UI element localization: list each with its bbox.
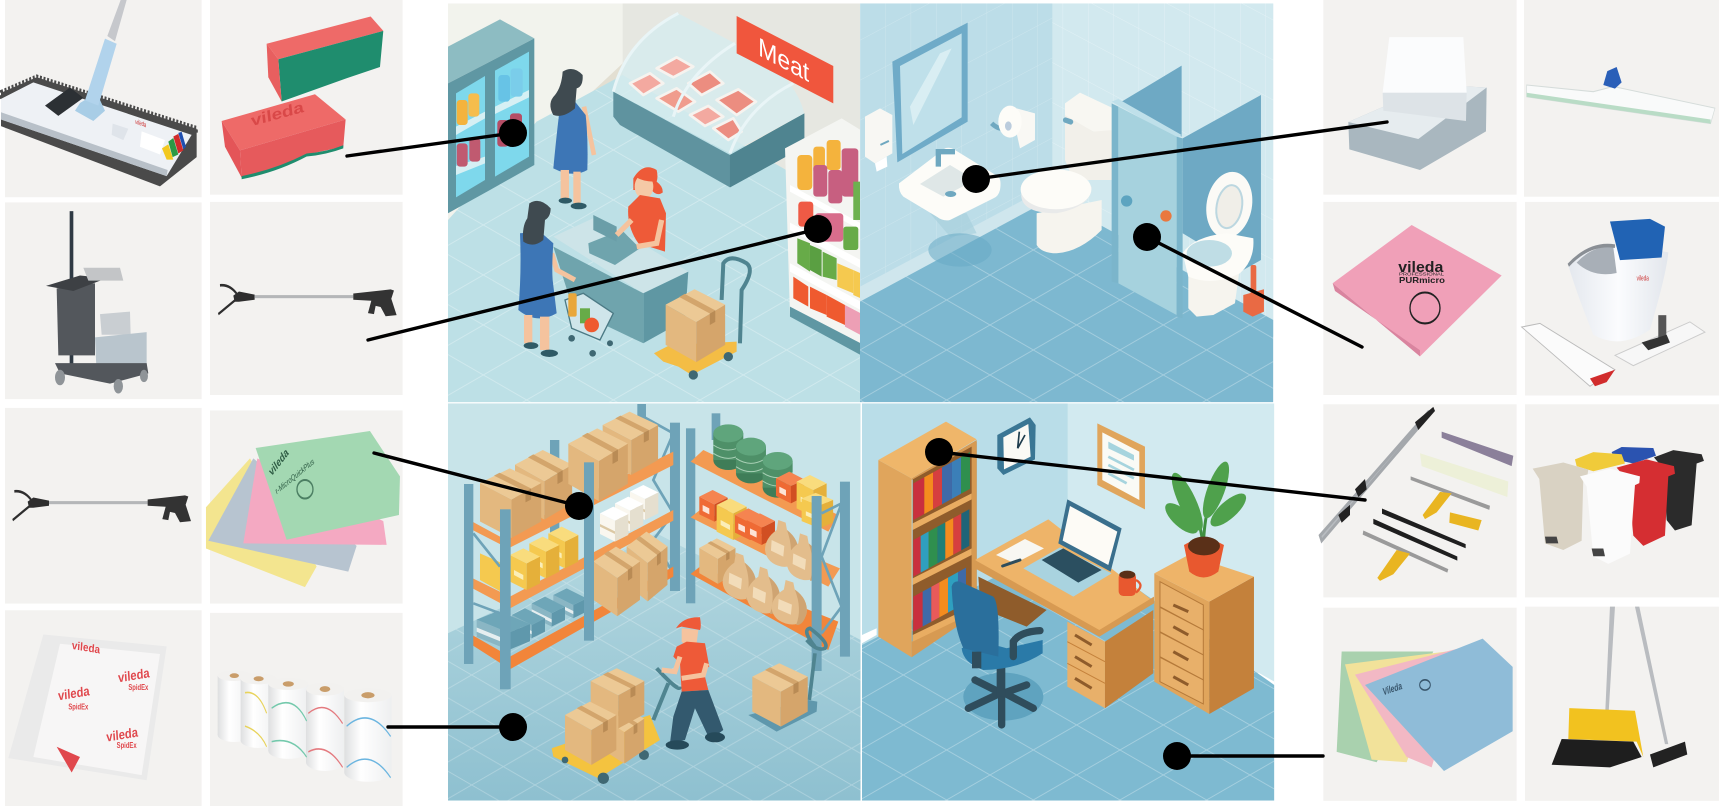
scene: supermarket [448,3,863,402]
desk [975,519,1154,708]
bookcase [878,422,977,657]
tile: paper towel rolls [210,613,403,806]
product tiles: right columns [1320,0,1719,801]
checkout counter [553,215,688,343]
callout: fridge to sponges [347,119,527,156]
books lower shelf [913,568,966,632]
callout: cubicle to pink cloth [1133,223,1362,347]
shopping cart [565,293,613,357]
office floor [862,578,1274,800]
wall clock [997,417,1036,475]
office chair [952,581,1043,725]
tile: flat mop: vileda [135,119,147,130]
meat display counter [613,13,804,187]
soap dispenser [865,108,892,172]
washroom floor [860,198,1273,402]
tile: coloured microfibre cloths [206,410,403,604]
potted plant [1160,459,1251,577]
toilet in open area [1021,93,1113,253]
tile: SpidEx bag: SpidEx [68,704,88,712]
toilet brush [1243,265,1264,317]
tile: mop bucket set [1522,202,1719,396]
tile: SpidEx bag: vileda [106,726,139,745]
callout: shelf to litter picker tile [368,215,832,340]
hand cart with boxes [552,668,680,784]
tile: SpidEx bag: vileda [58,685,91,704]
tile: floor squeegee [1524,0,1719,197]
callout: bookcase to window kit [925,438,1365,500]
customer at meat counter [550,69,594,209]
toilet inside cubicle [1183,168,1257,317]
customer at checkout [518,201,575,357]
tile: dustpan and brush [1525,607,1719,801]
tile: pink PURmicro cloth: PROFESSIONAL [1399,272,1444,277]
tile: SpidEx bag: SpidEx [128,684,148,692]
tile: coloured microfibre cloths: vileda [268,446,291,479]
tile: flat mop [1,0,202,197]
tile: mop bucket set: vileda [1637,276,1649,283]
paper and pen [996,539,1044,566]
product shelf [785,118,861,355]
tile: blue and coloured sheets [1323,608,1517,801]
tile: SpidEx bag: vileda [118,667,151,686]
sink [899,148,1001,267]
Meat sign [737,16,833,103]
toilet paper holder [992,106,1035,148]
filing cabinet [1154,555,1254,714]
tile: pink PURmicro cloth: PURmicro [1399,277,1445,286]
cubicle partition [1112,66,1261,318]
framed document [1097,423,1145,509]
mirror [892,23,968,162]
warehouse floor [448,533,861,801]
tile: SpidEx bag [5,610,202,806]
warehouse worker [662,617,725,750]
shop floor [448,75,861,402]
scene: office [862,403,1274,801]
scene: washroom [860,3,1274,402]
coffee mug [1119,571,1140,596]
tile: blue and coloured sheets: Vileda [1382,680,1403,698]
tile: SpidEx bag: vileda [71,639,101,657]
tile: melamine sponges [1323,0,1517,195]
scene: warehouse [448,403,861,801]
tile: litter picker lower [5,408,202,604]
callout lines and markers [347,119,1387,770]
callout: warehouse rack to cloths [374,453,593,520]
pallet jack with box [748,628,826,732]
tile: red and green sponges: vileda [250,98,306,130]
tile: red and green sponges [210,0,403,195]
tile: coloured microfibre cloths: r-MicroQuickPlus [274,456,316,496]
product tiles: left columns [1,0,403,806]
laptop [1023,499,1122,597]
tile: SpidEx bag: SpidEx [117,742,137,750]
books middle shelf [913,509,969,577]
tile: pedal bins [1525,404,1719,597]
books top shelf [913,452,970,520]
cashier [617,167,666,252]
tile: pink PURmicro cloth: vileda [1398,259,1444,275]
callout: warehouse floor to paper rolls [388,713,527,741]
right racking [686,413,850,671]
tile: pink PURmicro cloth [1323,202,1517,395]
callout: sink to melamine sponges [962,122,1387,193]
hand truck with box [654,258,750,380]
drinks fridge [448,19,534,213]
left racking [464,404,680,689]
tile: cleaning trolley [5,202,202,399]
tile: window cleaning kit [1320,404,1517,597]
Meat sign: Meat [758,31,810,89]
callout: office floor to sheets [1163,742,1323,770]
tile: litter picker upper [210,202,403,395]
